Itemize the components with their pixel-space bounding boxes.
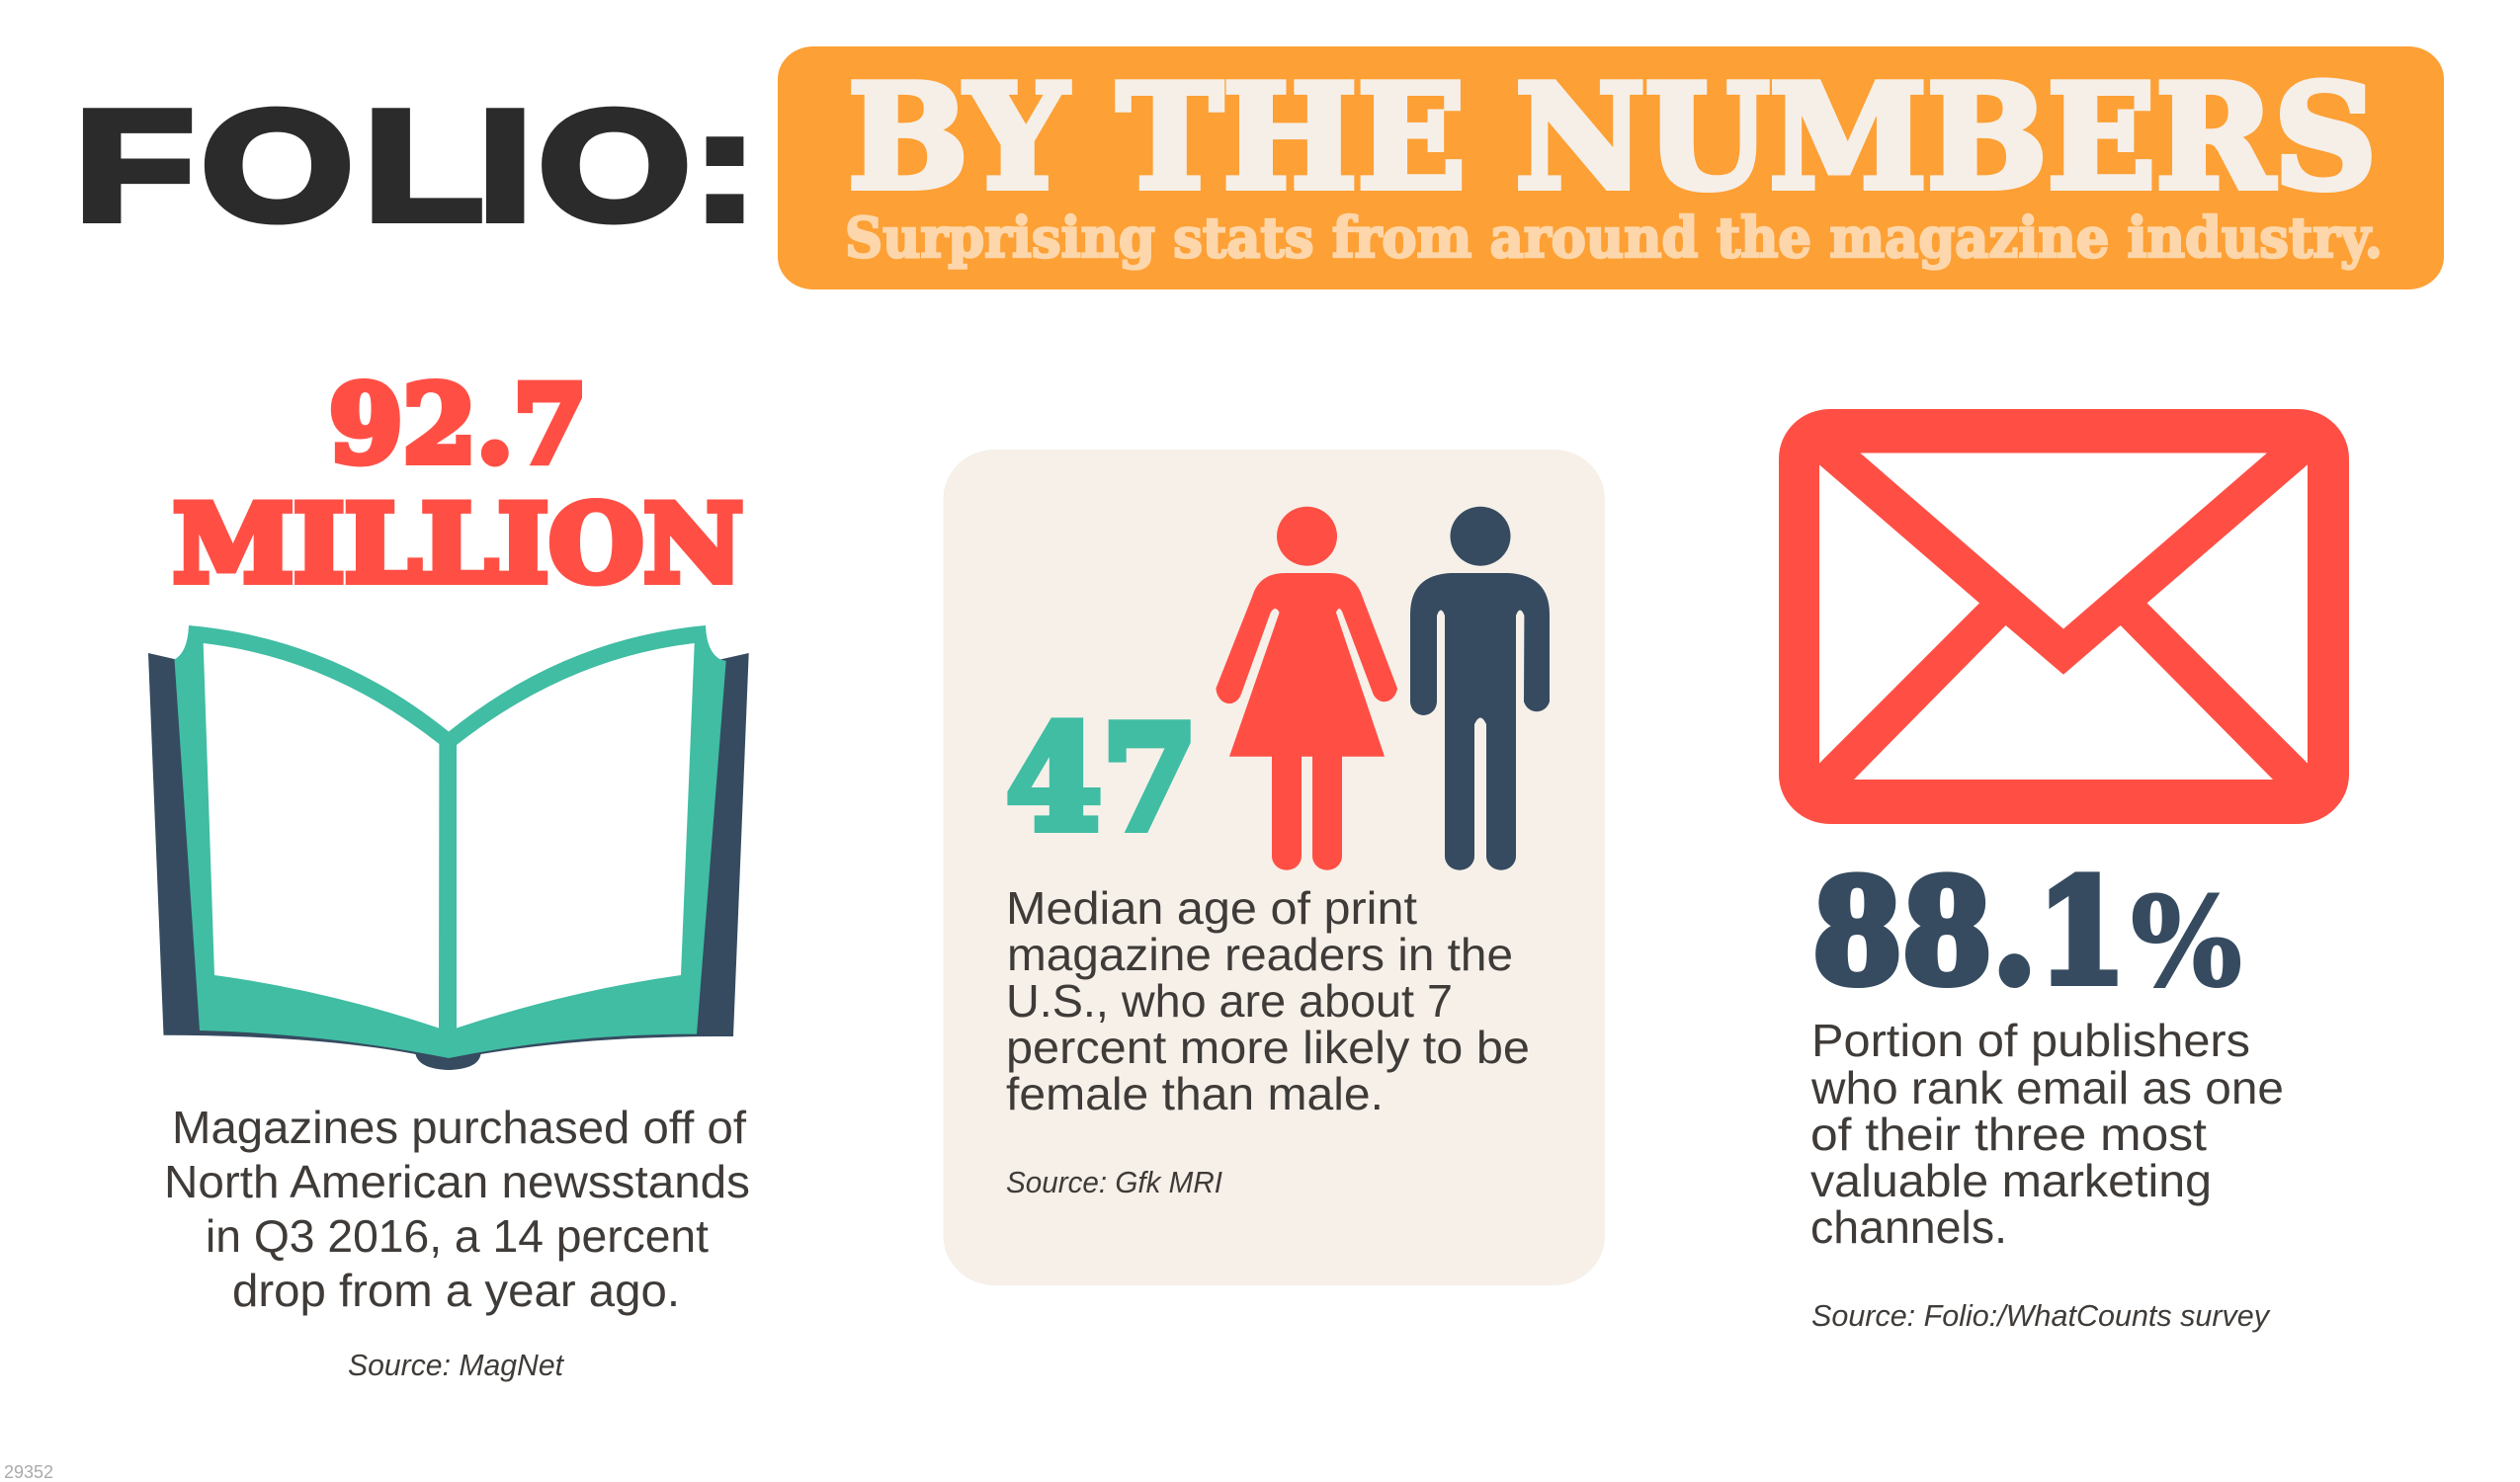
source: MagNet: Source: MagNet: [348, 1348, 564, 1382]
caption: median age: Median age of print: [1006, 882, 1417, 934]
source: Gfk MRI: Source: Gfk MRI: [1006, 1165, 1222, 1199]
caption: email marketing: channels.: [1810, 1201, 2007, 1253]
panel background: [943, 450, 1605, 1285]
caption: magazines purchased: drop from a year ago.: [232, 1265, 680, 1316]
caption: median age: U.S., who are about 7: [1006, 975, 1453, 1027]
caption: magazines purchased: [164, 1102, 750, 1316]
icon: envelope: [1779, 409, 2349, 824]
big number: MILLION: MILLION: [173, 482, 743, 607]
panel: email stat: [1779, 409, 2349, 1333]
banner subtitle: Surprising stats from around the magazine industry.: [845, 206, 2383, 271]
caption: median age: female than male.: [1006, 1068, 1384, 1119]
icon: man: [1410, 507, 1550, 870]
big number: 47: 47: [1006, 696, 1198, 864]
icon: open book: [148, 625, 749, 1070]
caption: magazines purchased: Magazines purchased off of: [172, 1102, 746, 1153]
icon: woman: [1216, 507, 1397, 870]
big number: 92.7: 92.7: [329, 363, 587, 487]
big number: 88.1%: 88.1: [1812, 849, 2127, 1017]
banner: by the numbers: [778, 46, 2444, 289]
caption: email marketing: Portion of publishers: [1811, 1015, 2250, 1066]
caption: median age: [1006, 882, 1530, 1119]
caption: median age: percent more likely to be: [1006, 1022, 1530, 1073]
caption: email marketing: of their three most: [1810, 1109, 2207, 1160]
logo: FOLIO:: FOLIO:: [75, 78, 757, 253]
big number: 88.1%: %: [2131, 870, 2242, 1015]
caption: email marketing: who rank email as one: [1810, 1062, 2284, 1113]
job number: 29352: [4, 1462, 53, 1482]
source: Folio:/WhatCounts survey: Source: Folio:/WhatCounts survey: [1811, 1298, 2271, 1333]
caption: magazines purchased: in Q3 2016, a 14 percent: [206, 1210, 709, 1262]
caption: median age: magazine readers in the: [1007, 929, 1513, 980]
caption: email marketing: valuable marketing: [1810, 1155, 2212, 1206]
banner title: BY THE NUMBERS: [848, 53, 2377, 221]
caption: magazines purchased: North American newsstands: [164, 1156, 750, 1207]
panel: newsstand magazines stat: [148, 363, 750, 1382]
panel: median age stat: [943, 450, 1605, 1285]
banner background: [778, 46, 2444, 289]
caption: email marketing: [1810, 1015, 2284, 1253]
